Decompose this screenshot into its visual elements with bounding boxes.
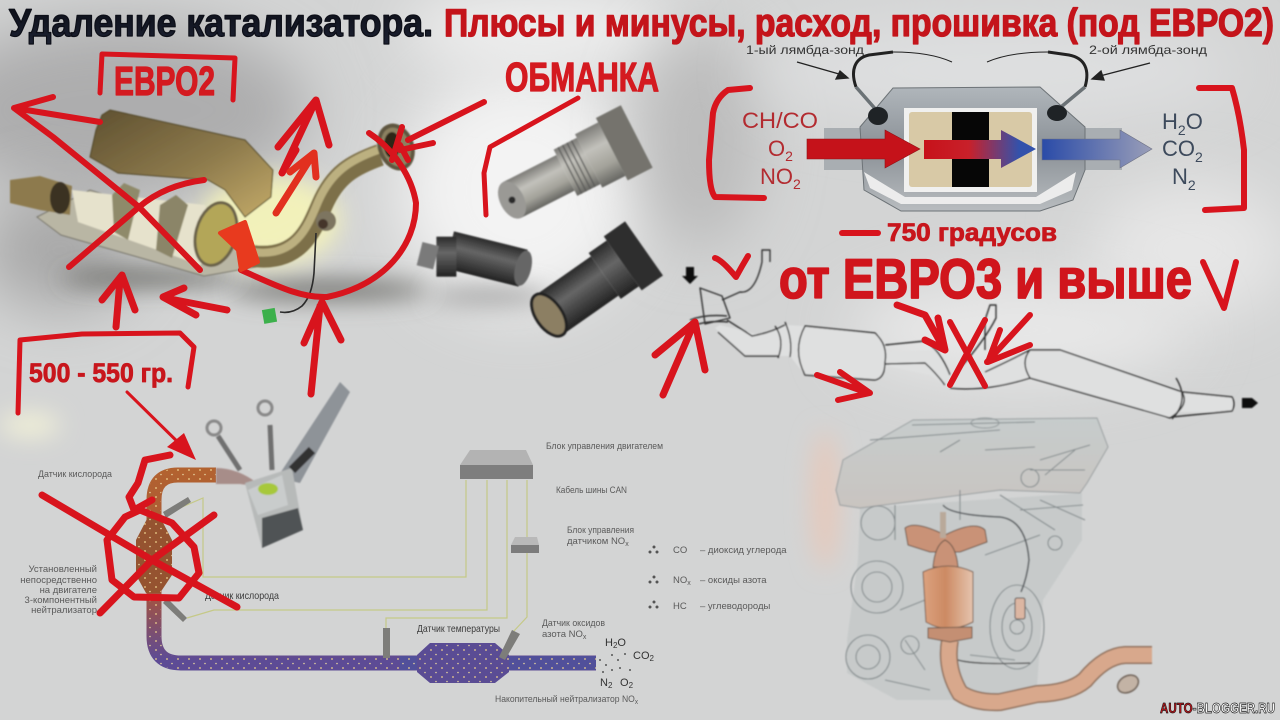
schematic labels: Кабель шины CAN (556, 485, 627, 496)
outlet gas formulas: N (1172, 164, 1188, 189)
output gases (599, 637, 654, 690)
schematic labels: Блок управления двигателем (546, 441, 663, 452)
schematic labels: x (635, 699, 638, 706)
output gases: 2 (613, 641, 618, 650)
inlet gas formulas: NO (760, 164, 793, 189)
legend: NO (673, 575, 687, 586)
schematic labels: непосредственно (20, 575, 97, 586)
outlet gas formulas: 2 (1195, 149, 1203, 165)
inlet gas formulas (742, 108, 818, 192)
engine cylinder illustration (207, 382, 350, 548)
schematic labels: датчиком NO (567, 536, 625, 547)
outlet gas formulas: CO (1162, 136, 1195, 161)
red cross over near-engine converter (42, 455, 237, 613)
legend: x (687, 580, 691, 587)
output gases: O (620, 677, 629, 689)
inlet gas formulas: CH/CO (742, 108, 818, 133)
photo: catalytic converter with downpipe (10, 110, 419, 276)
NOx control unit (511, 537, 539, 553)
title: Удаление катализатора. (9, 2, 433, 45)
output gases: H (605, 637, 613, 649)
heading: ЕВРО2: ЕВРО2 (114, 58, 215, 104)
outlet gas formulas: 2 (1188, 177, 1196, 193)
schematic labels: азота NO (542, 629, 583, 640)
schematic labels: x (625, 541, 629, 548)
legend: – диоксид углерода (700, 545, 787, 556)
arrows to lambda sensors (797, 62, 1150, 80)
inlet gas formulas: 2 (793, 176, 801, 192)
red brackets (709, 88, 1244, 210)
annotation: 500 - 550 гр.: 500 - 550 гр. (29, 358, 173, 388)
schematic labels: нейтрализатор (31, 605, 97, 616)
exhaust pipe (154, 475, 596, 663)
title (9, 2, 1274, 45)
arrow: outlet gases (1042, 130, 1152, 168)
schematic labels: Блок управления (567, 525, 634, 536)
legend: HC (673, 601, 687, 612)
converter near engine (136, 517, 172, 593)
legend (648, 545, 787, 612)
schematic labels: x (583, 634, 587, 641)
line drawing: exhaust system (682, 250, 1258, 419)
label: second lambda sensor: 2-ой лямбда-зонд (1089, 43, 1207, 57)
output gases: CO (633, 650, 650, 662)
catalytic converter cutaway (824, 87, 1122, 211)
annotation: 750 градусов: 750 градусов (887, 219, 1057, 247)
sensors (163, 497, 520, 660)
arrow: inlet gases (807, 130, 920, 168)
outlet gas formulas: H (1162, 109, 1178, 134)
red markup over converter (14, 97, 484, 394)
illustration: engine with exhaust manifold (836, 418, 1152, 702)
photo: oxygen sensor spacers (415, 105, 663, 349)
schematic labels: Накопительный нейтрализатор NO (495, 694, 650, 705)
label: first lambda sensor: 1-ый лямбда-зонд (746, 43, 864, 57)
inlet gas formulas: O (768, 136, 785, 161)
inlet gas formulas: 2 (785, 148, 793, 164)
schematic labels: Датчик температуры (417, 623, 500, 635)
panel: catalyst reaction diagram (709, 43, 1244, 211)
outlet gas formulas (1162, 109, 1203, 193)
schematic labels: Датчик оксидов (542, 618, 605, 629)
red markup over exhaust (655, 305, 1030, 400)
engine control unit (460, 450, 533, 479)
output gases: O (617, 637, 626, 649)
heading: ОБМАНКА: ОБМАНКА (505, 54, 659, 100)
outlet gas formulas: O (1186, 109, 1203, 134)
legend: – оксиды азота (700, 575, 767, 586)
arrow: temperature pointer (127, 392, 196, 460)
wiring (175, 480, 527, 632)
red pointer to spacers (484, 98, 578, 215)
schematic labels: на двигателе (40, 585, 97, 596)
schematic labels: Датчик кислорода (38, 469, 113, 480)
annotation: 500 - 550 гр. (18, 333, 194, 413)
heading: от ЕВРО3 и выше: от ЕВРО3 и выше (779, 247, 1192, 310)
output gases: 2 (629, 681, 634, 690)
output gases: 2 (608, 681, 613, 690)
sensor cables (854, 52, 1087, 112)
legend: – углеводороды (700, 601, 770, 612)
output gases: N (600, 677, 608, 689)
schematic labels: 3-компонентный (25, 595, 97, 606)
outlet gas formulas: 2 (1178, 122, 1186, 138)
panel: exhaust after-treatment schematic (20, 382, 787, 706)
schematic labels: Установленный (28, 564, 97, 575)
icon: sensor wire with green connector (262, 233, 316, 324)
legend: CO (673, 545, 687, 556)
schematic labels: Датчик кислорода (205, 590, 279, 602)
arrow: conversion (924, 130, 1036, 168)
schematic labels (20, 441, 663, 706)
output gases: 2 (650, 654, 654, 663)
NOx storage converter (417, 643, 509, 683)
